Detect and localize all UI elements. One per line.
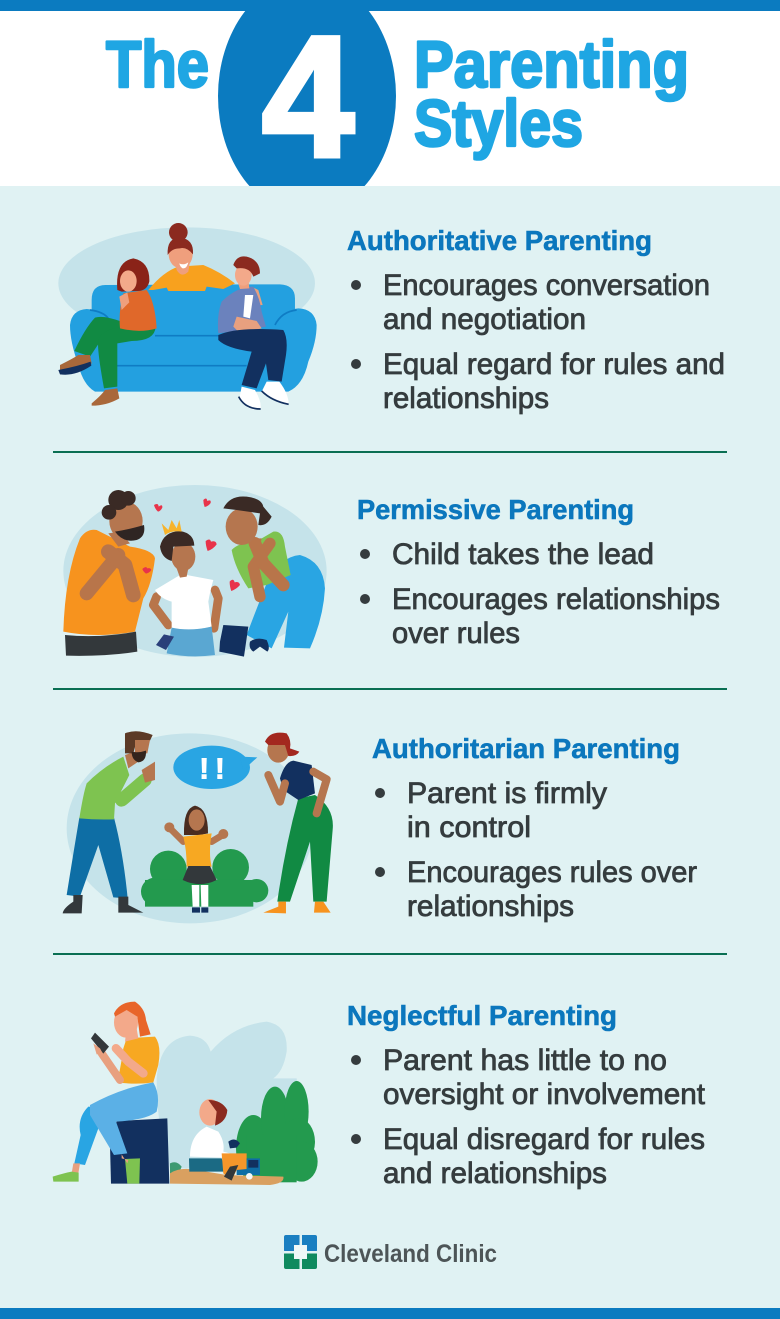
bullet text: rules over relationships: Encourages rules over xyxy=(407,856,697,889)
bullet dot xyxy=(360,549,370,559)
title word: The: The xyxy=(106,27,209,101)
bullet text continued: relationships xyxy=(383,382,549,415)
bullet dot xyxy=(351,359,361,369)
bullet dot xyxy=(351,1055,361,1065)
logo wordmark: Cleveland Clinic xyxy=(324,1240,497,1268)
bullet text: equal regard: Equal regard for rules and xyxy=(383,348,725,381)
bullet dot xyxy=(351,280,361,290)
heading: Neglectful Parenting xyxy=(347,1000,617,1031)
bullet text: child leads: Child takes the lead xyxy=(392,538,654,571)
title number 4: 4 xyxy=(262,1,354,193)
heading: Authoritative Parenting xyxy=(347,225,652,256)
panel: authoritarian parenting xyxy=(63,731,697,923)
heading: Permissive Parenting xyxy=(357,494,634,525)
title words: Parenting: Parenting xyxy=(414,27,689,101)
illustration: parent on phone, child playing alone xyxy=(53,1002,318,1185)
bullet dot xyxy=(351,1134,361,1144)
bullet text continued: relationships xyxy=(407,890,574,923)
bullet dot xyxy=(375,788,385,798)
title xyxy=(106,11,686,186)
bullet text continued: and relationships xyxy=(383,1157,607,1190)
illustration: parents scolding child xyxy=(63,731,333,923)
bullet text continued: over rules xyxy=(392,617,520,650)
bullet text: relationships: Encourages relationships xyxy=(392,583,720,616)
bullet text: oversight: Parent has little to no xyxy=(383,1044,667,1077)
exclamation marks: !! xyxy=(199,754,225,786)
illustration: parents adoring crowned child xyxy=(63,485,327,657)
bullet text: conversation: Encourages conversation xyxy=(383,269,710,302)
illustration: family on sofa xyxy=(58,223,317,410)
bullet text: in control: Parent is firmly xyxy=(407,777,607,810)
bullet text continued: in control xyxy=(407,811,531,844)
bullet text: disregard: Equal disregard for rules xyxy=(383,1123,705,1156)
blue oval behind number xyxy=(218,11,396,186)
panel: neglectful parenting xyxy=(53,1000,706,1190)
footer bar xyxy=(0,1308,780,1319)
bullet dot xyxy=(375,867,385,877)
panel: permissive parenting xyxy=(63,485,720,657)
header band xyxy=(0,0,780,186)
panel: authoritative parenting xyxy=(58,223,725,415)
icon: logo cross mark xyxy=(284,1235,317,1269)
logo: Cleveland Clinic xyxy=(284,1235,497,1269)
bullet text continued: oversight or involvement xyxy=(383,1078,706,1111)
heading: Authoritarian Parenting xyxy=(372,733,680,764)
bullet dot xyxy=(360,594,370,604)
title words: Styles: Styles xyxy=(414,86,583,160)
bullet text continued: and negotiation xyxy=(383,303,586,336)
